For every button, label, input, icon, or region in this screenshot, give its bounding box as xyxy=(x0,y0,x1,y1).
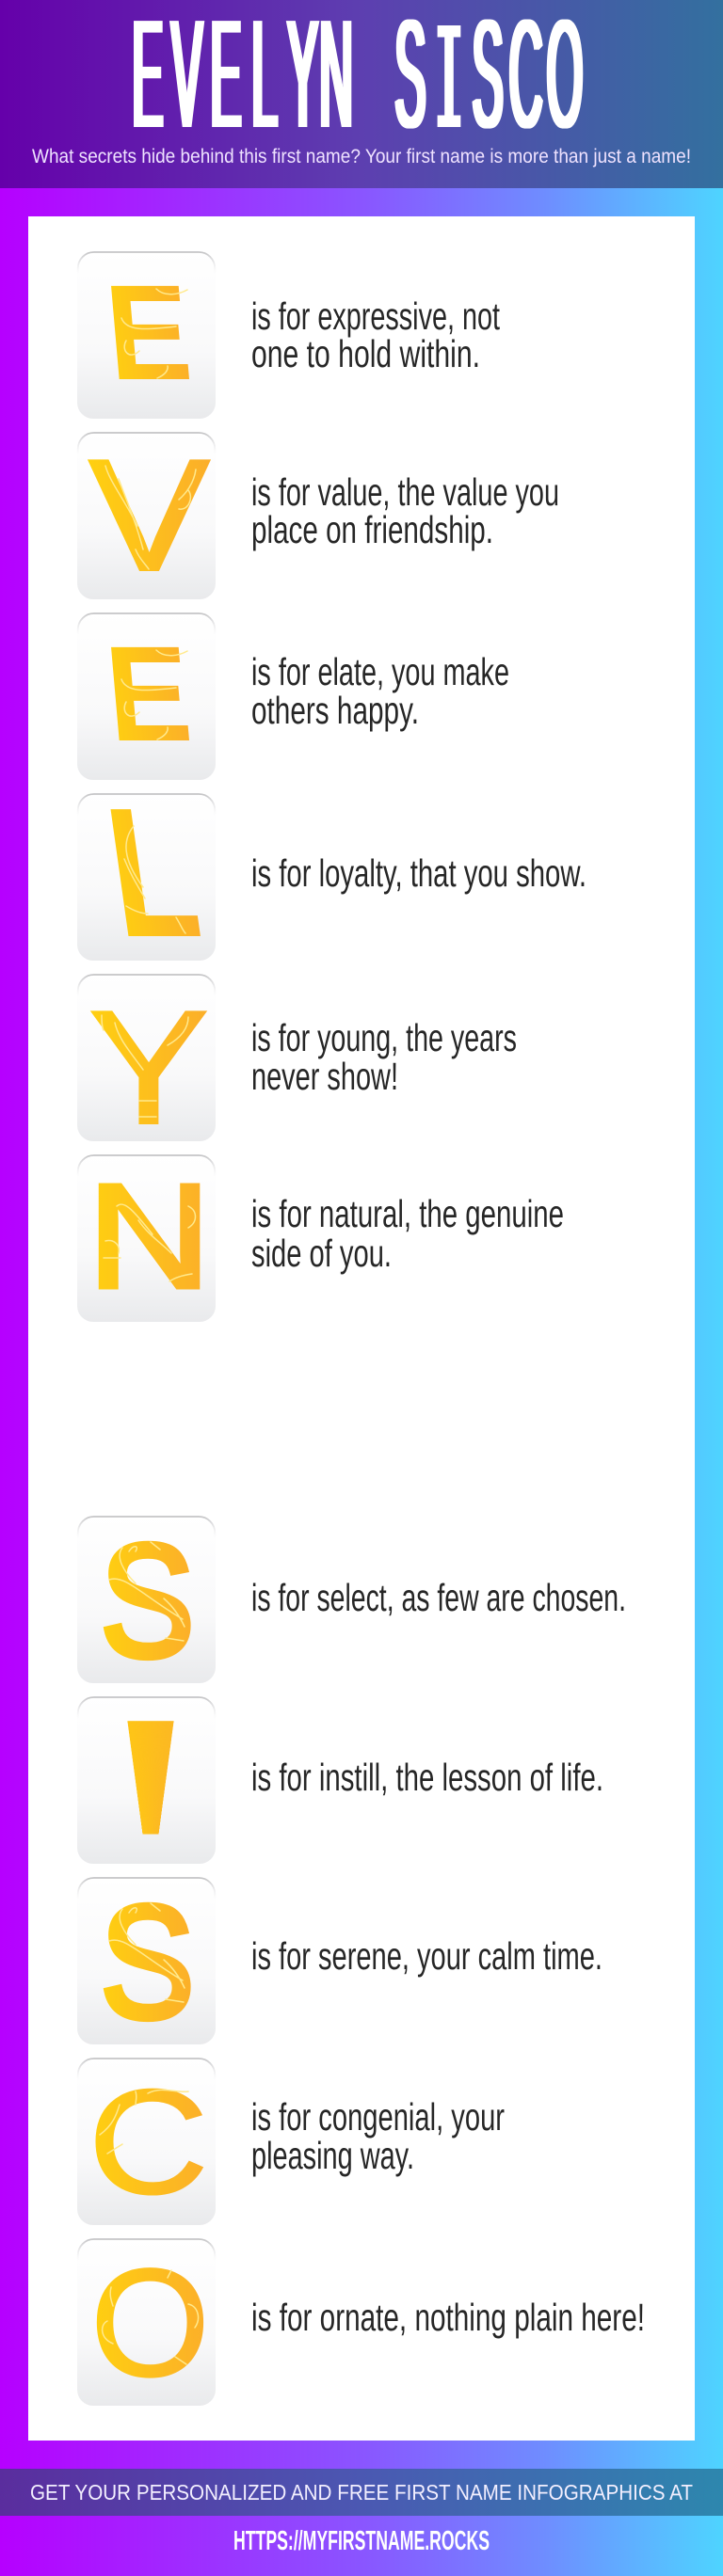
letter tile V: V xyxy=(89,427,209,604)
footer call to action band xyxy=(0,2469,723,2516)
letter tile C: C xyxy=(88,2059,208,2225)
row S second xyxy=(77,1872,602,2051)
text: E: one to hold within. xyxy=(251,332,480,375)
letter tile S xyxy=(77,1511,216,1690)
row Y xyxy=(77,974,517,1157)
text: V: place on friendship. xyxy=(251,508,493,551)
letter tile S: S xyxy=(101,1511,194,1690)
header banner xyxy=(0,0,723,188)
text: C xyxy=(251,2095,505,2177)
text: Y: is for young, the years xyxy=(251,1016,517,1059)
letter tile E xyxy=(77,612,216,780)
letter tile E xyxy=(77,251,216,419)
text: E: is for elate, you make xyxy=(251,650,509,693)
text: C: pleasing way. xyxy=(251,2134,414,2177)
title: I xyxy=(435,0,463,174)
text: N xyxy=(251,1192,564,1275)
row O xyxy=(77,2236,645,2409)
text: V xyxy=(251,470,559,551)
letter tile Y: Y xyxy=(89,978,208,1157)
letter tile I xyxy=(77,1696,216,1864)
row E second xyxy=(77,612,509,780)
row S xyxy=(77,1511,626,1690)
text: E: others happy. xyxy=(251,689,419,732)
footer url: HTTPS://MYFIRSTNAME.ROCKS xyxy=(233,2526,490,2556)
letter tile S: S xyxy=(101,1872,194,2051)
text: E: is for expressive, not xyxy=(251,294,500,338)
row L xyxy=(77,770,586,977)
text: E xyxy=(251,294,500,375)
row I xyxy=(77,1696,603,1864)
text: L: is for loyalty, that you show. xyxy=(251,851,586,895)
white content panel xyxy=(28,216,695,2441)
letter tile N: N xyxy=(88,1154,211,1319)
text: N: is for natural, the genuine xyxy=(251,1192,564,1235)
letter tile O: O xyxy=(90,2236,210,2409)
row V xyxy=(77,427,559,604)
letter tile E: E xyxy=(100,257,197,408)
text: Y: never show! xyxy=(251,1055,398,1098)
letter tile L: L xyxy=(96,770,210,977)
title xyxy=(132,0,583,174)
text: V: is for value, the value you xyxy=(251,470,559,514)
row E xyxy=(77,251,500,419)
text: N: side of you. xyxy=(251,1232,392,1275)
row C xyxy=(77,2058,505,2225)
text: E xyxy=(251,650,509,732)
tile letter I (tapered real text) xyxy=(95,1721,206,1835)
text: C: is for congenial, your xyxy=(251,2095,505,2139)
text: Y xyxy=(251,1016,517,1098)
text: I xyxy=(38,1456,264,1845)
letter tile S xyxy=(77,1872,216,2051)
row N xyxy=(77,1154,564,1322)
letter tile E: E xyxy=(100,618,197,770)
